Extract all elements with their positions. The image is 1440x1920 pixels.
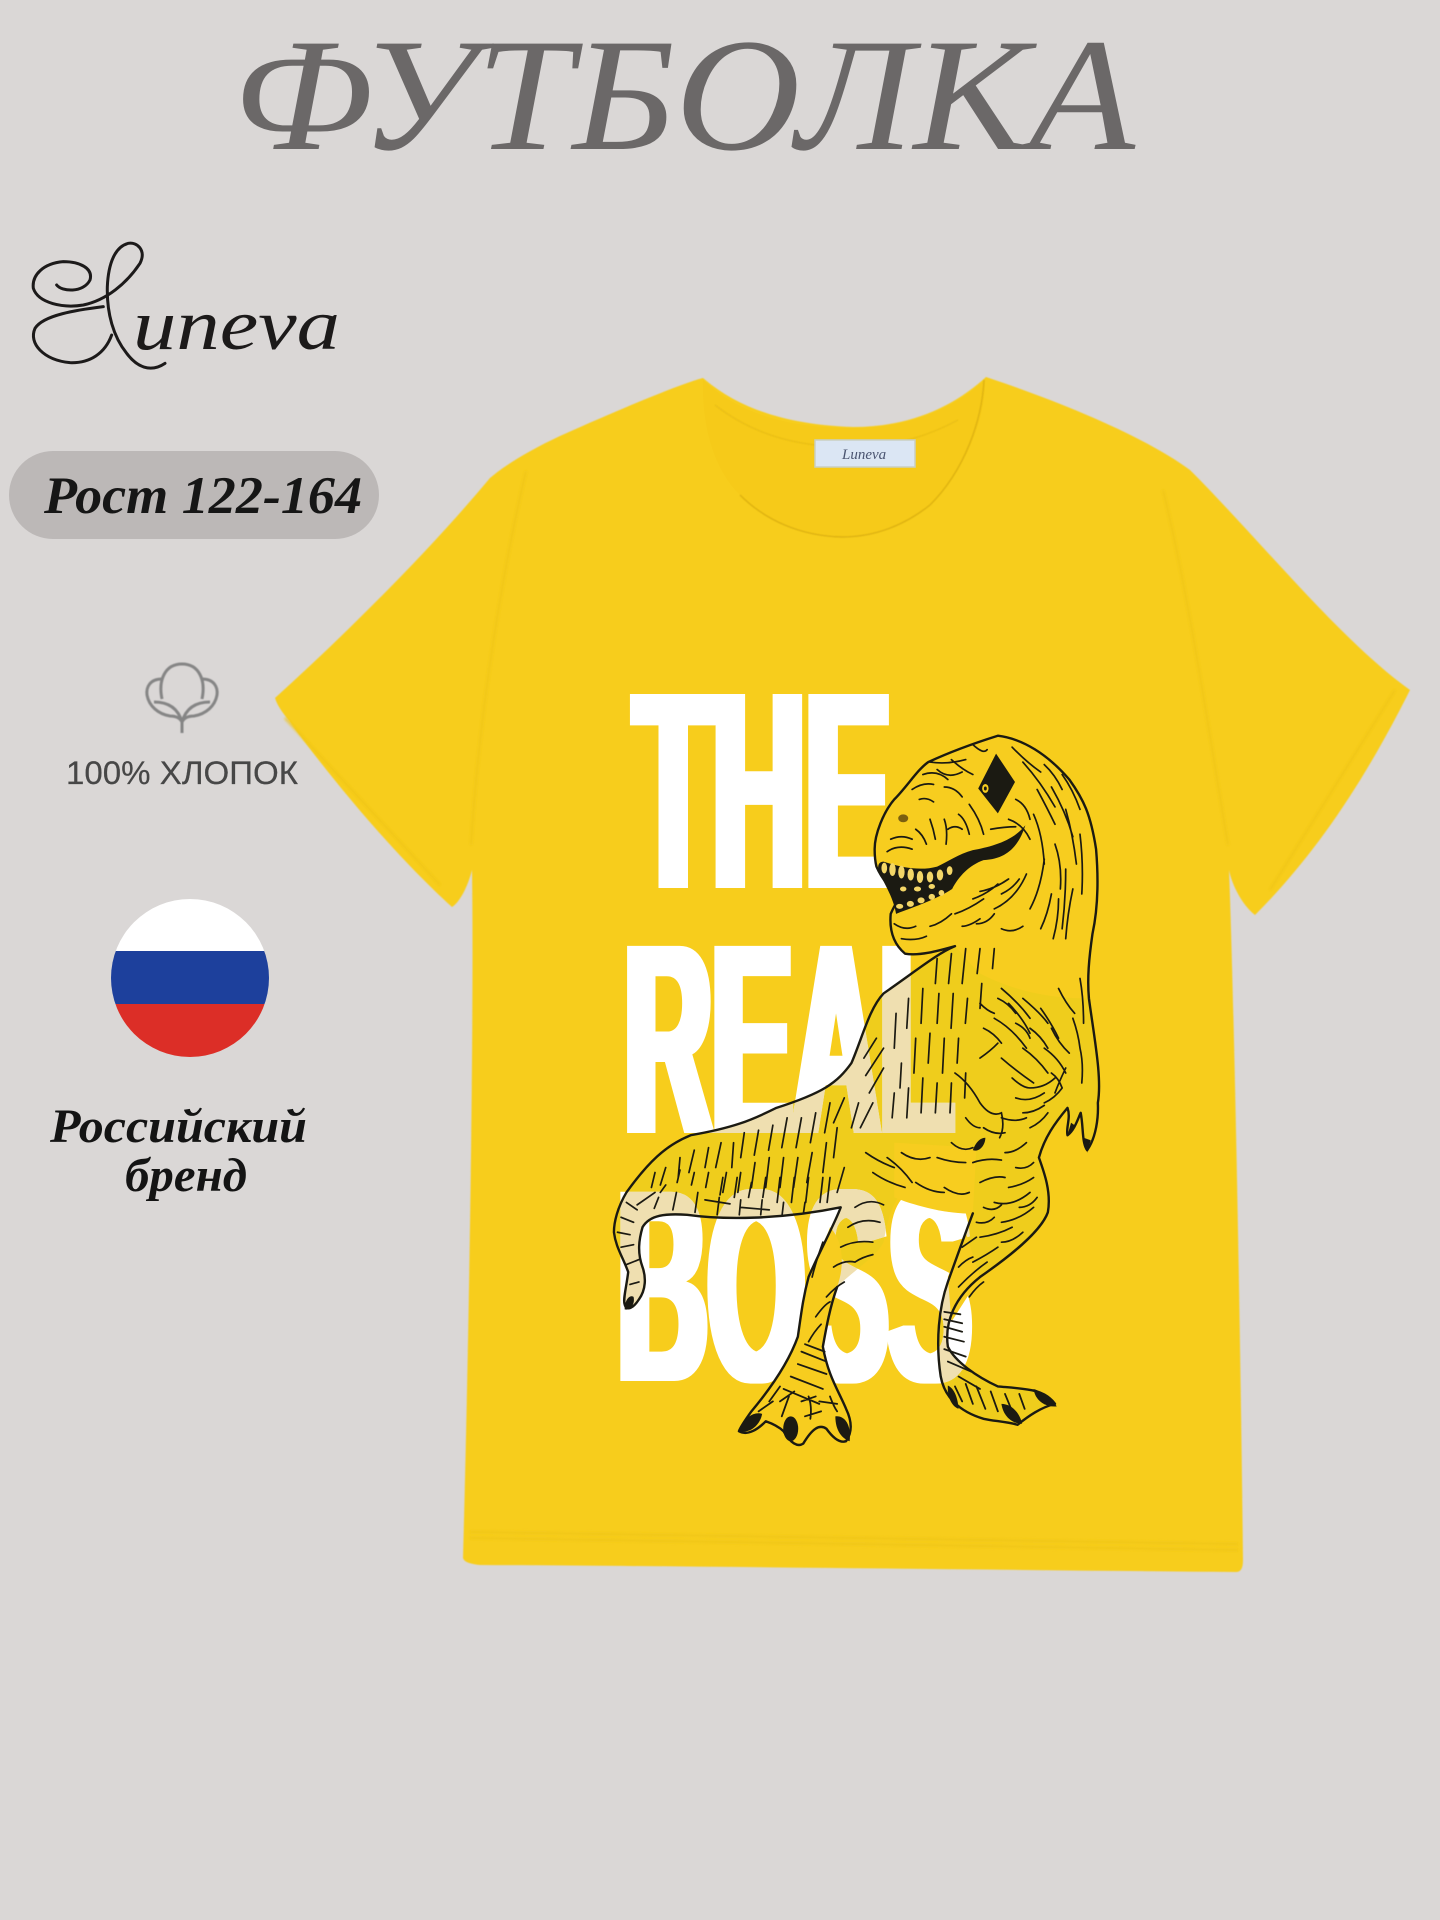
title: ФУТБОЛКА (233, 6, 1136, 184)
text: REAL (624, 887, 954, 1191)
icon: russian flag (111, 899, 269, 1057)
height badge: Рост 122-164 (43, 467, 362, 525)
neck label: Luneva (841, 447, 886, 463)
yellow t-shirt (275, 377, 1410, 1572)
shirt body (275, 377, 1410, 1572)
foot hatching (759, 1312, 1025, 1419)
head wrinkles (887, 745, 1082, 940)
text: BOSS (618, 1133, 972, 1440)
print: THE REAL BOSS (618, 633, 972, 1440)
neck label (815, 440, 915, 467)
claws (625, 1123, 1091, 1441)
teeth (881, 863, 952, 909)
dino body tint (614, 929, 1099, 1445)
icon: cotton (147, 664, 217, 733)
lower leg and solid areas (739, 1227, 851, 1445)
dino outline (614, 736, 1099, 1445)
armhole and hem seams (285, 471, 1395, 1550)
brand logo: Luneva: uneva (133, 285, 340, 365)
height badge (9, 451, 379, 539)
brand logo: Luneva (33, 243, 340, 368)
mouth (878, 825, 1025, 914)
brand origin text (49, 1100, 307, 1202)
illustration: t-rex (614, 736, 1099, 1445)
body hatching (617, 949, 1084, 1342)
collar rib (703, 380, 985, 537)
print: THE REAL BOSS: THE (634, 633, 891, 948)
cotton label: 100% ХЛОПОК (66, 755, 298, 791)
dino head and neck (875, 736, 1098, 998)
collar seam (740, 380, 984, 537)
brand origin text: Российский (49, 1100, 307, 1153)
eye (898, 754, 1015, 822)
brand origin text: бренд (125, 1149, 247, 1202)
